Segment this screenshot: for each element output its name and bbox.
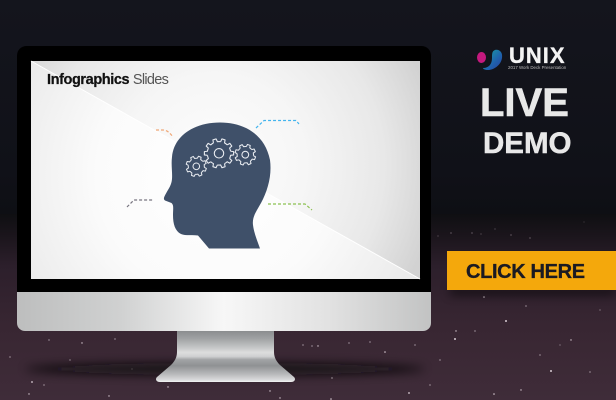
icon: left gear — [183, 153, 209, 179]
monitor chin — [17, 292, 431, 331]
connector: green dashes — [268, 204, 312, 210]
monitor bezel — [17, 46, 431, 292]
monitor screen — [31, 61, 420, 279]
connector: grey dashes — [127, 200, 154, 207]
button: click here — [447, 251, 616, 290]
button shadow — [450, 287, 616, 295]
connector: blue dashes — [256, 120, 299, 128]
logo: UNIX — [477, 43, 566, 70]
logo tagline: 2017 Work Deck Presentation — [508, 65, 566, 70]
heading: DEMO: DEMO — [483, 127, 572, 160]
connector: orange dashes — [156, 130, 173, 137]
button label: CLICK HERE — [466, 261, 585, 283]
background floor — [0, 214, 616, 400]
monitor floor shadow — [25, 363, 425, 375]
icon: logo swirl — [477, 50, 502, 70]
star field — [9, 296, 600, 400]
icon: right gear — [232, 141, 259, 168]
dim stars above the button — [438, 222, 584, 239]
icon: head silhouette with gears — [164, 122, 271, 248]
heading: LIVE: LIVE — [480, 81, 569, 125]
icon: large gear — [204, 138, 234, 169]
monitor stand — [156, 331, 295, 382]
slide title: Infographics Slides — [47, 72, 168, 88]
background wall — [0, 0, 616, 214]
logo wordmark: UNIX — [509, 43, 566, 68]
